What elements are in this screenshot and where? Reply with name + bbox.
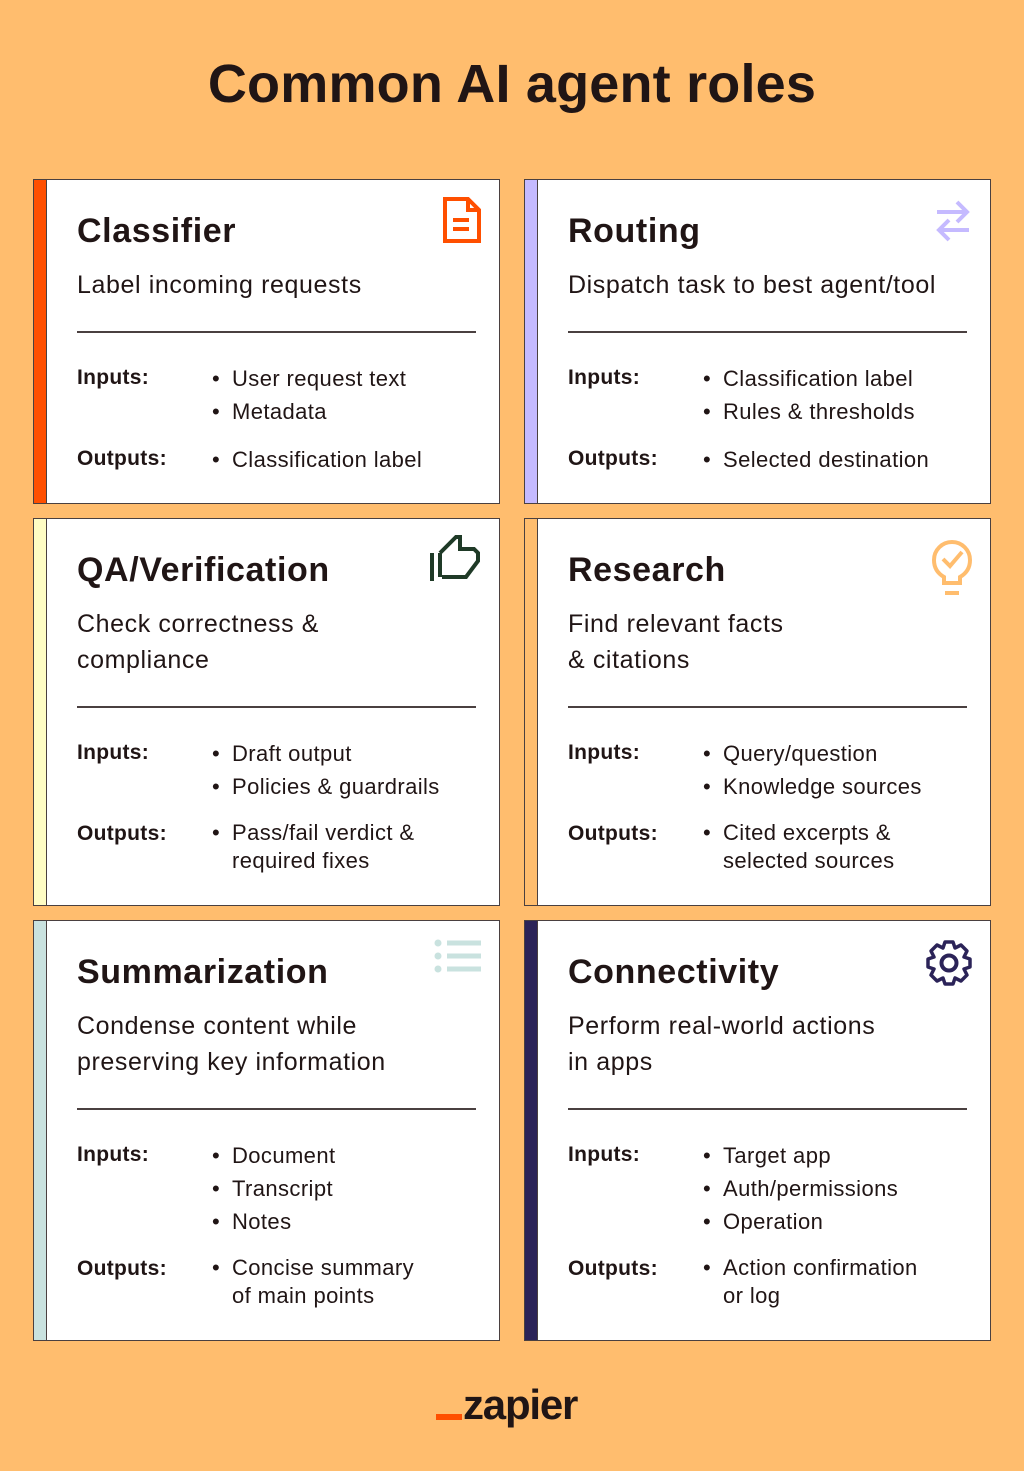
panel: connectivity: or log <box>723 1283 780 1308</box>
panel: routing <box>524 179 991 504</box>
panel: research: Inputs: <box>568 741 640 764</box>
panel: routing: Rules & thresholds <box>723 399 915 424</box>
panel: summarization: Summarization <box>77 953 329 991</box>
panel: qa: • <box>212 741 220 766</box>
panel: summarization: Document <box>232 1143 335 1168</box>
panel: routing: Classification label <box>723 366 913 391</box>
panel: routing: Outputs: <box>568 447 658 470</box>
panel: connectivity: Operation <box>723 1209 823 1234</box>
panel: summarization: Condense content while <box>77 1012 357 1040</box>
panel: routing: • <box>703 399 711 424</box>
panel: connectivity: Auth/permissions <box>723 1176 898 1201</box>
icon: document <box>443 197 481 243</box>
panel: summarization: Inputs: <box>77 1143 149 1166</box>
icon: gear <box>926 940 972 986</box>
panel: research: Find relevant facts <box>568 610 784 638</box>
panel: summarization: preserving key information <box>77 1048 386 1076</box>
panel: qa: required fixes <box>232 848 370 873</box>
panel: qa: Draft output <box>232 741 352 766</box>
panel: routing: Inputs: <box>568 366 640 389</box>
panel: summarization: of main points <box>232 1283 375 1308</box>
panel: research: • <box>703 820 711 845</box>
panel: connectivity: • <box>703 1143 711 1168</box>
panel: research: • <box>703 774 711 799</box>
panel: routing: • <box>703 366 711 391</box>
panel: research: & citations <box>568 646 690 674</box>
panel: connectivity: Outputs: <box>568 1257 658 1280</box>
panel: qa: QA/Verification <box>77 551 330 589</box>
panel: summarization: Transcript <box>232 1176 333 1201</box>
panel: qa: Policies & guardrails <box>232 774 440 799</box>
panel: classifier: Label incoming requests <box>77 271 362 299</box>
panel: connectivity: • <box>703 1255 711 1280</box>
panel: connectivity: • <box>703 1209 711 1234</box>
panel: classifier: • <box>212 366 220 391</box>
panel: classifier: User request text <box>232 366 406 391</box>
panel: summarization <box>33 920 500 1341</box>
panel: connectivity: Target app <box>723 1143 831 1168</box>
panel: research: Cited excerpts & <box>723 820 891 845</box>
panel: summarization: • <box>212 1209 220 1234</box>
panel: summarization: Notes <box>232 1209 291 1234</box>
panel: summarization: • <box>212 1143 220 1168</box>
panel: routing: Routing <box>568 212 701 250</box>
panel: classifier: • <box>212 447 220 472</box>
panel: connectivity: Action confirmation <box>723 1255 918 1280</box>
panel: classifier: Inputs: <box>77 366 149 389</box>
panel: qa <box>33 518 500 906</box>
panel: summarization: • <box>212 1255 220 1280</box>
panel: classifier <box>33 179 500 504</box>
icon: list <box>434 940 481 972</box>
panel: qa: Outputs: <box>77 822 167 845</box>
panel: connectivity: Perform real-world actions <box>568 1012 875 1040</box>
panel: qa: Pass/fail verdict & <box>232 820 414 845</box>
panel: research: • <box>703 741 711 766</box>
panel: routing: • <box>703 447 711 472</box>
panel: routing: Selected destination <box>723 447 929 472</box>
panel: qa: compliance <box>77 646 209 674</box>
panel: research: Knowledge sources <box>723 774 922 799</box>
panel: connectivity: • <box>703 1176 711 1201</box>
panel: classifier: Metadata <box>232 399 327 424</box>
panel: classifier: Classification label <box>232 447 422 472</box>
panel: research: Query/question <box>723 741 878 766</box>
panel: summarization: • <box>212 1176 220 1201</box>
icon: lightbulb <box>932 540 972 595</box>
panel: connectivity: Connectivity <box>568 953 779 991</box>
icon: thumbs up <box>430 535 480 581</box>
panel: qa: • <box>212 820 220 845</box>
panel: classifier: Classifier <box>77 212 236 250</box>
title: Common AI agent roles <box>208 54 816 114</box>
panel: research: Research <box>568 551 726 589</box>
logo: zapier: zapier <box>463 1381 577 1428</box>
panel: qa: Check correctness & <box>77 610 319 638</box>
panel: summarization: Concise summary <box>232 1255 414 1280</box>
panel: qa: Inputs: <box>77 741 149 764</box>
icon: arrows <box>936 200 970 242</box>
panel: routing: Dispatch task to best agent/tool <box>568 271 936 299</box>
panel: research: Outputs: <box>568 822 658 845</box>
panel: research: selected sources <box>723 848 894 873</box>
panel: classifier: • <box>212 399 220 424</box>
panel: research <box>524 518 991 906</box>
panel: classifier: Outputs: <box>77 447 167 470</box>
panel: qa: • <box>212 774 220 799</box>
panel: connectivity: in apps <box>568 1048 653 1076</box>
panel: connectivity <box>524 920 991 1341</box>
panel: summarization: Outputs: <box>77 1257 167 1280</box>
panel: connectivity: Inputs: <box>568 1143 640 1166</box>
